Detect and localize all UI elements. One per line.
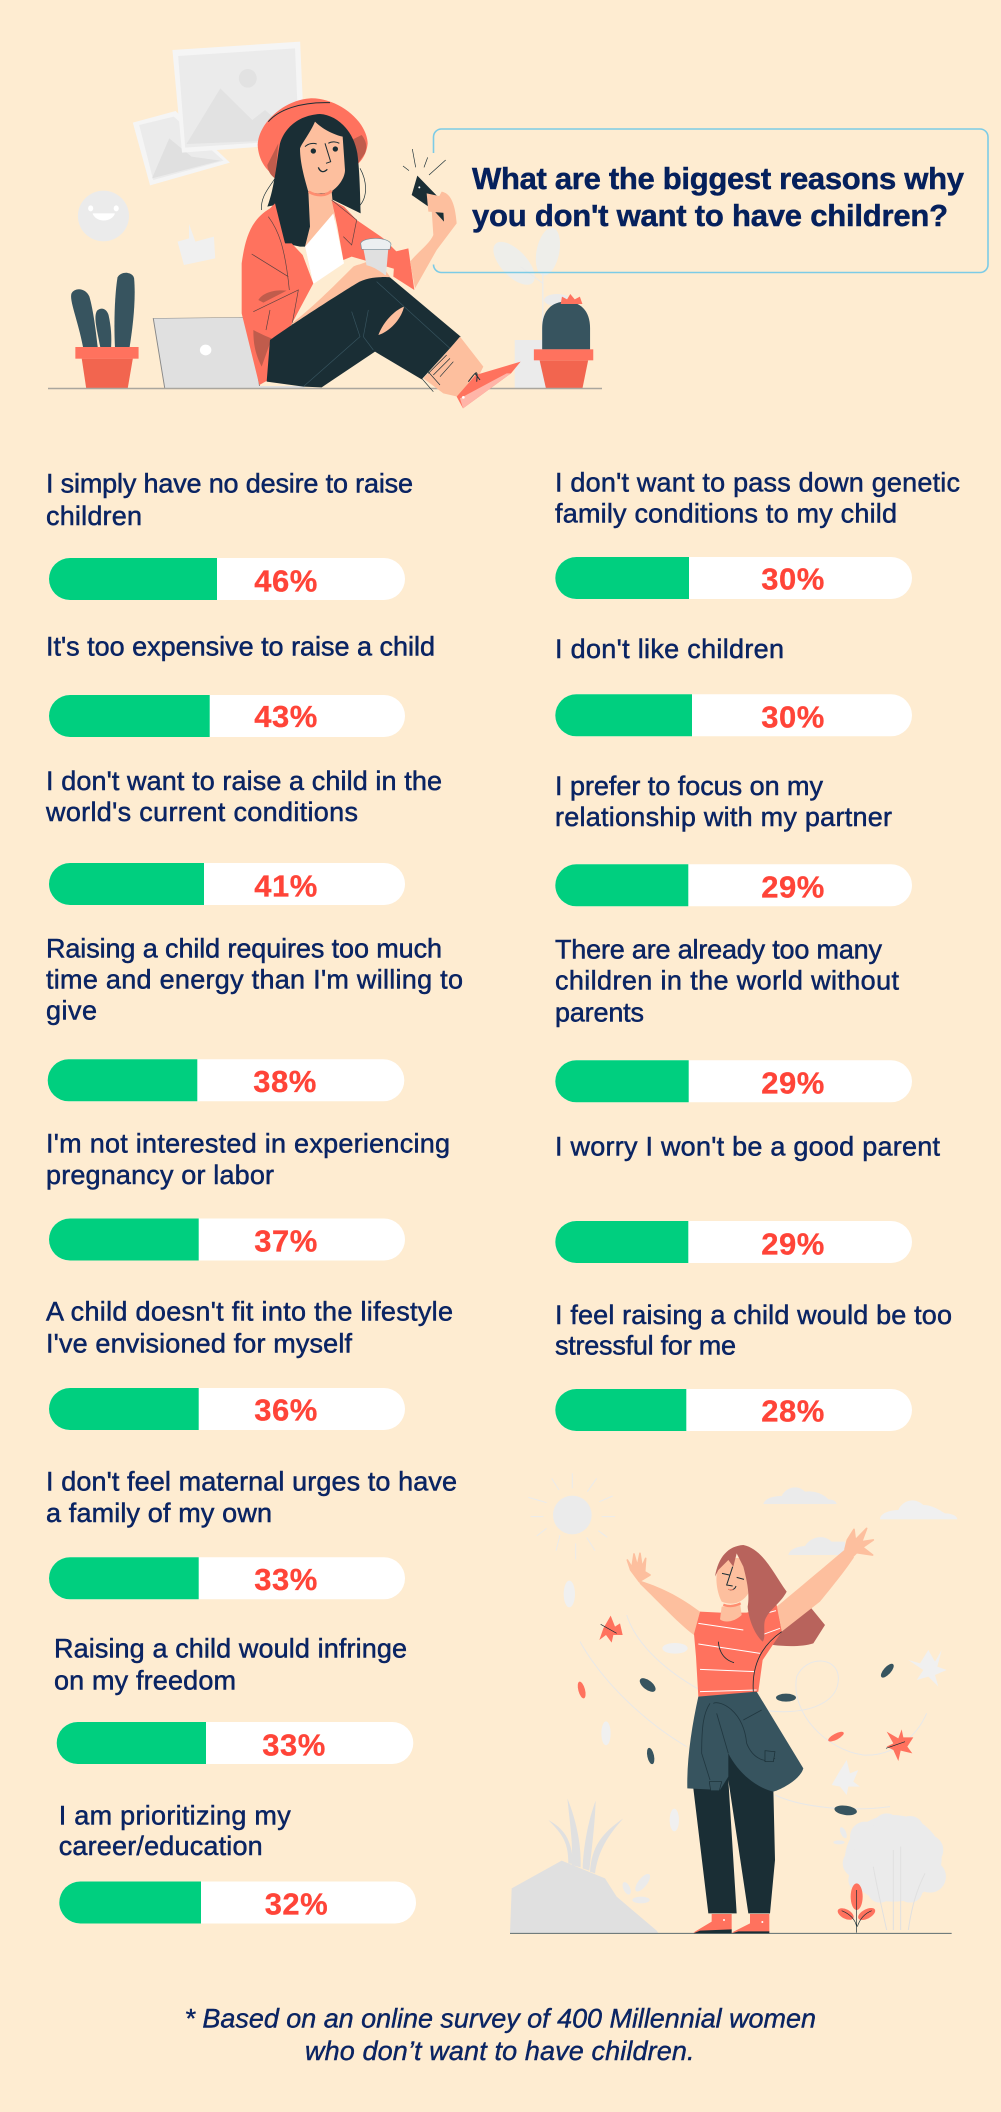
bar 43%: 43% bbox=[254, 699, 317, 734]
label: children bbox=[46, 501, 142, 531]
bar 29% bbox=[555, 1060, 912, 1102]
bar 41%: 41% bbox=[254, 869, 317, 904]
bar 36%: 36% bbox=[254, 1393, 317, 1428]
bar 29% bbox=[555, 864, 912, 906]
bar 33% bbox=[49, 1557, 405, 1599]
row: time and energy, 38% bbox=[46, 933, 463, 1101]
bar 30% bbox=[555, 694, 912, 736]
label: I'm not interested in experiencing bbox=[46, 1128, 450, 1158]
label bbox=[555, 771, 892, 832]
row: don't like children, 30% bbox=[555, 634, 912, 736]
bar 28%: 28% bbox=[761, 1394, 824, 1429]
row: partner, 29% bbox=[555, 771, 912, 906]
label bbox=[46, 1297, 453, 1359]
row: good parent, 29% bbox=[555, 1132, 940, 1263]
falling leaves bbox=[564, 1581, 947, 1831]
label: I don't want to pass down genetic bbox=[555, 468, 960, 498]
label bbox=[555, 1300, 952, 1361]
label: I prefer to focus on my bbox=[555, 771, 824, 801]
footnote: * Based on an online survey of 400 Millennial women bbox=[184, 2004, 816, 2034]
bar 29%: 29% bbox=[761, 1226, 824, 1261]
label: stressful for me bbox=[555, 1331, 736, 1361]
label: I worry I won't be a good parent bbox=[555, 1132, 940, 1162]
bush bbox=[833, 1813, 946, 1930]
row: genetic conditions, 30% bbox=[555, 468, 960, 599]
label bbox=[46, 1467, 457, 1528]
label bbox=[46, 933, 463, 1025]
row: too expensive, 43% bbox=[46, 632, 435, 737]
label bbox=[46, 469, 413, 531]
label: There are already too many bbox=[555, 934, 882, 964]
label bbox=[46, 1128, 450, 1190]
row: world conditions, 41% bbox=[45, 766, 442, 905]
bar 29%: 29% bbox=[761, 1065, 824, 1100]
label bbox=[59, 1800, 291, 1861]
label bbox=[555, 468, 960, 529]
bar 33%: 33% bbox=[262, 1727, 325, 1762]
bar 36% bbox=[49, 1388, 405, 1430]
label bbox=[54, 1633, 407, 1695]
footnote: who don’t want to have children. bbox=[305, 2036, 694, 2066]
ground line bbox=[48, 388, 602, 390]
title: What are the biggest reasons why bbox=[472, 161, 965, 196]
label bbox=[555, 934, 899, 1028]
label: children in the world without bbox=[555, 965, 899, 995]
title bbox=[472, 161, 965, 233]
label: Raising a child requires too much bbox=[46, 933, 442, 963]
label: time and energy than I'm willing to bbox=[46, 964, 463, 994]
label: pregnancy or labor bbox=[46, 1160, 274, 1190]
bar 30%: 30% bbox=[761, 561, 824, 596]
label: I simply have no desire to raise bbox=[46, 469, 413, 499]
bar 37% bbox=[49, 1218, 405, 1260]
bar 46% bbox=[49, 558, 405, 600]
label: career/education bbox=[59, 1831, 263, 1861]
coral plant bbox=[836, 1883, 877, 1933]
label: relationship with my partner bbox=[555, 802, 892, 832]
bar 28% bbox=[555, 1389, 912, 1431]
rock and grass bbox=[510, 1798, 658, 1933]
bar 41% bbox=[49, 863, 405, 905]
bar 38%: 38% bbox=[253, 1064, 316, 1099]
row: too stressful, 28% bbox=[555, 1300, 952, 1431]
row: pregnancy, 37% bbox=[46, 1128, 450, 1260]
row: career, 32% bbox=[59, 1800, 416, 1924]
label: I don't want to raise a child in the bbox=[46, 766, 442, 796]
label: on my freedom bbox=[54, 1665, 236, 1695]
label: world's current conditions bbox=[45, 797, 358, 827]
bar 30% bbox=[555, 557, 912, 599]
bar 46%: 46% bbox=[254, 564, 317, 599]
label: a family of my own bbox=[46, 1498, 272, 1528]
bar 33% bbox=[57, 1722, 413, 1764]
label: A child doesn't fit into the lifestyle bbox=[46, 1297, 453, 1327]
small grey sprig bbox=[621, 1872, 653, 1903]
bar 29% bbox=[555, 1221, 912, 1263]
row: lifestyle, 36% bbox=[46, 1297, 453, 1430]
background props: photos, emoji, cactus pots bbox=[71, 42, 593, 389]
bar 43% bbox=[49, 695, 405, 737]
bar 38% bbox=[48, 1059, 404, 1101]
bar 37%: 37% bbox=[254, 1224, 317, 1259]
row: maternal urges, 33% bbox=[46, 1467, 457, 1599]
label: parents bbox=[555, 998, 644, 1028]
bar 32% bbox=[59, 1882, 416, 1924]
title: you don't want to have children? bbox=[472, 198, 948, 233]
clouds bbox=[763, 1487, 957, 1555]
bar 32%: 32% bbox=[265, 1887, 328, 1922]
bar 33%: 33% bbox=[254, 1562, 317, 1597]
label: I don't like children bbox=[555, 634, 784, 664]
row: no desire, 46% bbox=[46, 469, 413, 600]
bar 30%: 30% bbox=[761, 699, 824, 734]
row: freedom, 33% bbox=[54, 1633, 413, 1764]
woman figure bbox=[242, 98, 521, 408]
label: family conditions to my child bbox=[555, 499, 897, 529]
ground line bbox=[510, 1932, 952, 1935]
bar 29%: 29% bbox=[761, 870, 824, 905]
label: give bbox=[46, 995, 97, 1025]
label bbox=[45, 766, 442, 827]
illustration: seated woman with phone bbox=[48, 42, 602, 408]
callout: question box bbox=[434, 129, 988, 272]
standing woman bbox=[627, 1528, 873, 1933]
label: I've envisioned for myself bbox=[46, 1329, 352, 1359]
label: It's too expensive to raise a child bbox=[46, 632, 435, 662]
label: I don't feel maternal urges to have bbox=[46, 1467, 457, 1497]
footnote bbox=[184, 2004, 816, 2066]
illustration: woman with arms raised among falling leaves bbox=[510, 1473, 957, 1933]
label: I feel raising a child would be too bbox=[555, 1300, 952, 1330]
wind lines bbox=[580, 1615, 927, 1809]
sun bbox=[528, 1473, 615, 1559]
label: Raising a child would infringe bbox=[54, 1633, 407, 1663]
label: I am prioritizing my bbox=[59, 1800, 291, 1830]
row: too many children, 29% bbox=[555, 934, 912, 1102]
